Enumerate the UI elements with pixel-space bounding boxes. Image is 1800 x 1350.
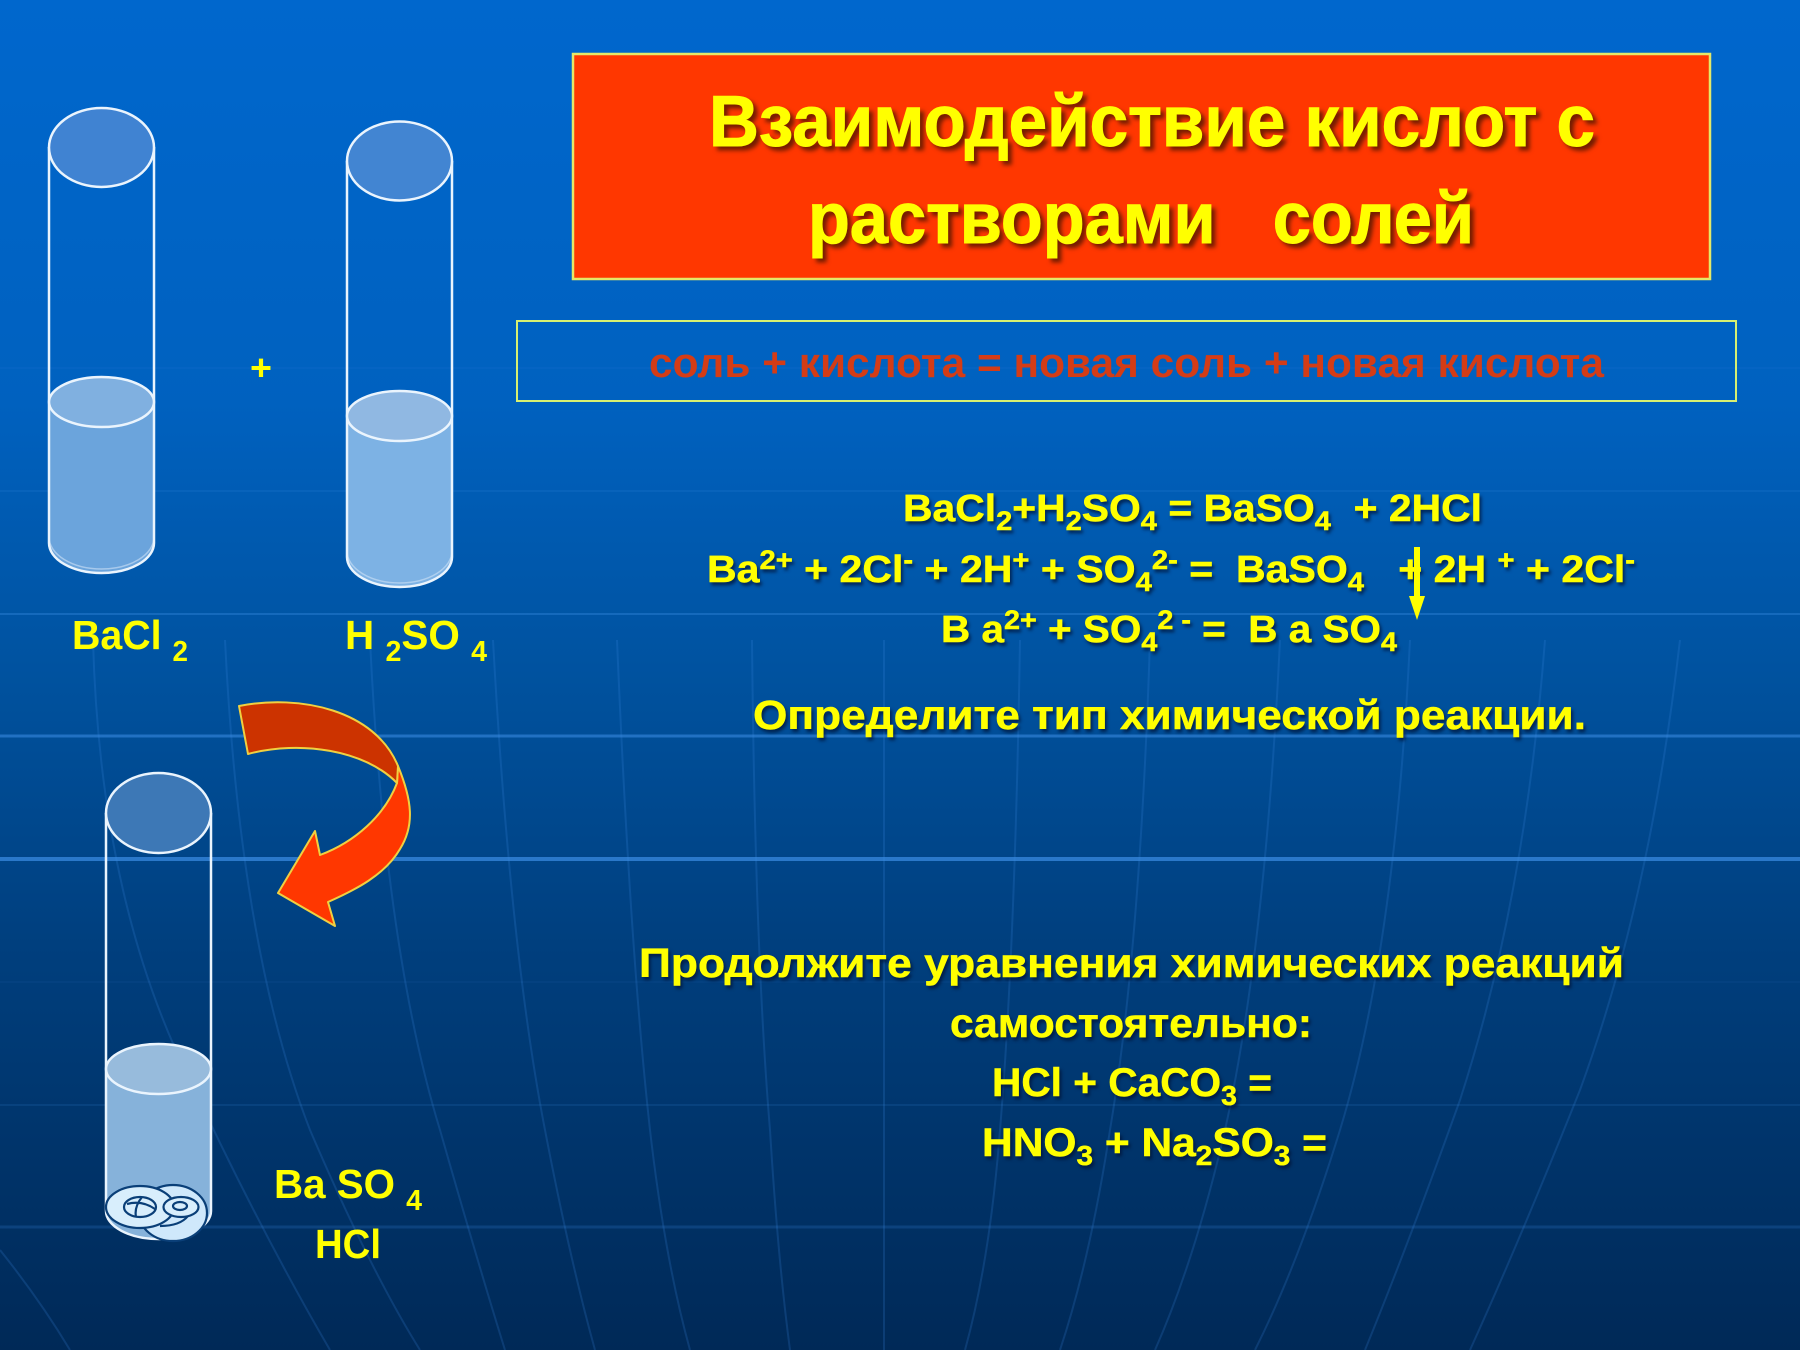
label: BaSO4 and HCl: HCl: [315, 1221, 381, 1267]
task block: 3: [1274, 1140, 1290, 1171]
net ionic equation: + SO: [1037, 609, 1141, 651]
molecular equation: 2: [996, 506, 1012, 536]
curved arrow: [239, 702, 410, 926]
task block: =: [1237, 1061, 1272, 1105]
title text: растворами солей: [808, 179, 1474, 259]
molecular equation: +H: [1012, 488, 1066, 530]
task block: =: [1290, 1121, 1327, 1165]
task block: 3: [1221, 1080, 1237, 1111]
task block: HNO: [982, 1121, 1071, 1165]
title text: Взаимодействие кислот с: [709, 82, 1595, 162]
task block: 2: [1196, 1140, 1212, 1171]
label: H2SO4: 2: [385, 636, 401, 668]
molecular equation: SO: [1082, 488, 1141, 530]
full ionic equation: 2-: [1152, 545, 1178, 575]
molecular equation: 4: [1315, 506, 1331, 536]
task block: SO: [1212, 1121, 1274, 1165]
molecular equation: BaCl: [903, 488, 990, 530]
full ionic equation: +: [1012, 545, 1030, 575]
net ionic equation: 2+: [1004, 605, 1037, 635]
title panel: [573, 54, 1710, 279]
test tube: product with precipitate: [106, 773, 211, 1241]
label: H2SO4: 4: [471, 636, 487, 668]
task: reaction type: Определите тип химической реакции.: [753, 692, 1586, 738]
full ionic equation: + 2H: [913, 549, 1012, 591]
full ionic equation: 4: [1348, 567, 1364, 597]
label: H2SO4: H: [345, 612, 375, 658]
plus sign: +: [250, 347, 272, 388]
general rule box: [517, 321, 1736, 401]
full ionic equation: = BaSO: [1178, 549, 1348, 591]
general rule box: соль + кислота = новая соль + новая кислота: [649, 339, 1605, 386]
label: BaSO4 and HCl: 4: [406, 1185, 422, 1217]
molecular equation: + 2HCl: [1331, 488, 1482, 530]
equations block: [707, 488, 1635, 738]
full ionic equation: -: [903, 545, 913, 575]
full ionic equation: 2+: [759, 545, 793, 575]
full ionic equation: 4: [1136, 567, 1152, 597]
net ionic equation: 2 -: [1157, 605, 1191, 635]
full ionic equation: + 2Cl: [793, 549, 903, 591]
label: BaCl2: BaCl: [72, 612, 165, 658]
label: BaCl2: 2: [173, 636, 188, 668]
net ionic equation: = B a SO: [1191, 609, 1381, 651]
task block: 3: [1076, 1140, 1093, 1171]
net ionic equation: 4: [1381, 627, 1397, 657]
task block: [639, 940, 1624, 1171]
molecular equation: 2: [1066, 506, 1082, 536]
label: H2SO4: SO: [401, 612, 471, 658]
full ionic equation: + 2Cl: [1515, 549, 1625, 591]
full ionic equation: -: [1625, 545, 1635, 575]
label: BaSO4 and HCl: Ba SO: [274, 1161, 397, 1207]
precipitate down arrow: [1409, 547, 1425, 620]
precipitate crystals: [106, 1185, 207, 1241]
task block: HCl + CaCO: [992, 1061, 1218, 1105]
net ionic equation: B a: [941, 609, 1000, 651]
molecular equation: = BaSO: [1157, 488, 1315, 530]
title text: [709, 82, 1595, 259]
task block: + Na: [1093, 1121, 1197, 1165]
test tube: H2SO4: [347, 122, 452, 587]
label: BaSO4 and HCl: [274, 1161, 422, 1267]
test tube: BaCl2: [49, 108, 154, 573]
full ionic equation: +: [1498, 545, 1515, 575]
task block: самостоятельно:: [950, 1000, 1312, 1046]
molecular equation: 4: [1141, 506, 1157, 536]
full ionic equation: + 2H: [1364, 549, 1498, 591]
net ionic equation: 4: [1141, 627, 1157, 657]
full ionic equation: Ba: [707, 549, 756, 591]
task block: Продолжите уравнения химических реакций: [639, 940, 1624, 986]
full ionic equation: + SO: [1030, 549, 1136, 591]
